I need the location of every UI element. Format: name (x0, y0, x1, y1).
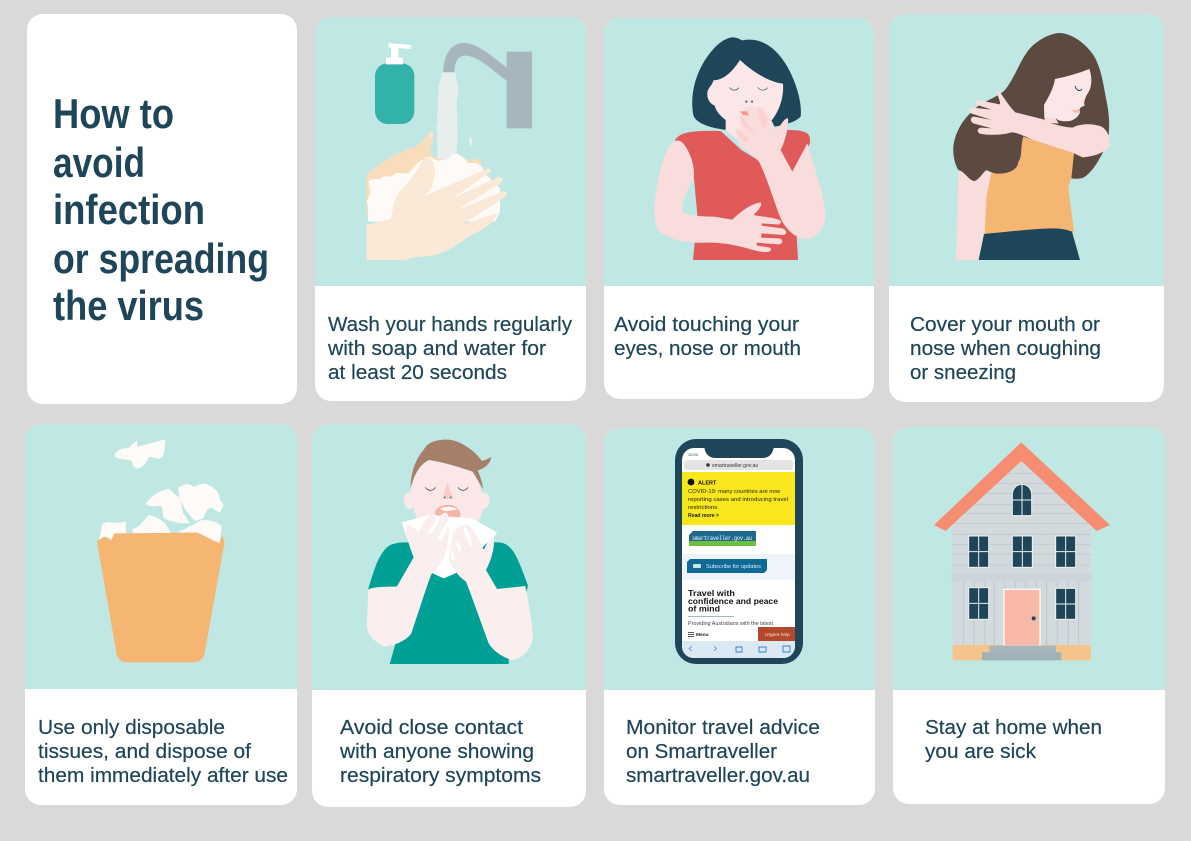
caption: wash hands (327, 314, 572, 384)
caption: smartraveller: on Smartraveller (626, 741, 777, 763)
caption: stay at home (925, 717, 1102, 763)
icon: phone showing Smartraveller site: Subscribe for updates (706, 564, 761, 570)
panel: avoid close contact (312, 424, 586, 807)
caption: cover mouth: nose when coughing (910, 338, 1101, 360)
panel: cover mouth (889, 14, 1164, 402)
icon: phone showing Smartraveller site: 10:00 (688, 452, 699, 457)
caption: wash hands: Wash your hands regularly (328, 314, 572, 336)
icon: man sneezing into tissue (367, 440, 533, 664)
icon: phone showing Smartraveller site: smartraveller.gov.au (712, 463, 758, 469)
caption: tissues: Use only disposable (38, 717, 225, 739)
caption: avoid touching: eyes, nose or mouth (614, 338, 801, 360)
caption: tissues (38, 717, 288, 787)
icon: phone showing Smartraveller site: of mind (688, 604, 720, 614)
panel: avoid touching face (604, 18, 874, 399)
icon: phone showing Smartraveller site: confidence and peace (688, 597, 779, 606)
caption: avoid touching (614, 314, 801, 360)
icon: phone showing Smartraveller site: restrictions. (688, 505, 719, 511)
icon: phone showing Smartraveller site: Urgent help (765, 632, 790, 638)
windows (969, 484, 1076, 619)
caption: smartraveller: smartraveller.gov.au (626, 765, 810, 787)
caption: close contact: with anyone showing (339, 741, 534, 763)
caption: tissues: tissues, and dispose of (38, 741, 251, 763)
caption: tissues: them immediately after use (38, 765, 288, 787)
caption: stay at home: you are sick (925, 741, 1037, 763)
icon: phone showing Smartraveller site: Menu (696, 632, 709, 638)
title heading (53, 90, 269, 329)
icon: phone showing Smartraveller site: ALERT (698, 480, 717, 486)
caption: avoid touching: Avoid touching your (614, 314, 799, 336)
caption: smartraveller (626, 717, 820, 787)
title heading: or spreading (53, 235, 269, 282)
caption: cover mouth: Cover your mouth or (910, 314, 1100, 336)
icon: soap, tap and washing hands (366, 43, 532, 260)
icon: woman coughing into elbow (953, 33, 1110, 260)
icon: house (934, 442, 1110, 660)
raised forearm and hand (736, 106, 826, 239)
title heading: infection (53, 186, 205, 233)
icon: phone showing Smartraveller site: Read more > (688, 513, 719, 519)
icon: phone showing Smartraveller site: smartraveller.gov.au (692, 535, 752, 542)
left arm and hand (367, 512, 449, 647)
panel: stay at home (893, 427, 1165, 804)
caption: close contact: respiratory symptoms (340, 765, 541, 787)
lower arm and hand (654, 141, 786, 252)
icon: phone showing Smartraveller site (675, 439, 803, 664)
title heading: avoid (53, 139, 145, 186)
title heading: the virus (53, 282, 204, 329)
icon: tissues and bin (97, 439, 224, 662)
caption: close contact (339, 717, 541, 787)
panel: disposable tissues (25, 424, 297, 805)
right arm and hand (449, 525, 533, 660)
icon: phone showing Smartraveller site: COVID-19: many countries are now (688, 489, 780, 495)
panel: title (27, 14, 297, 404)
icon: phone showing Smartraveller site: Travel with (688, 589, 735, 598)
icon: woman touching her face (654, 37, 826, 260)
panel: wash hands (315, 17, 586, 401)
title heading: How to (53, 90, 174, 137)
caption: cover mouth: or sneezing (910, 362, 1016, 384)
caption: wash hands: with soap and water for (327, 338, 546, 360)
caption: cover mouth (910, 314, 1101, 384)
caption: close contact: Avoid close contact (340, 717, 523, 739)
icon: phone showing Smartraveller site: reporting cases and introducing travel (688, 497, 788, 503)
caption: smartraveller: Monitor travel advice (626, 717, 820, 739)
panel: smartraveller (604, 428, 875, 805)
icon: phone showing Smartraveller site: Providing Australians with the latest (688, 621, 774, 627)
caption: stay at home: Stay at home when (925, 717, 1102, 739)
caption: wash hands: at least 20 seconds (328, 362, 507, 384)
